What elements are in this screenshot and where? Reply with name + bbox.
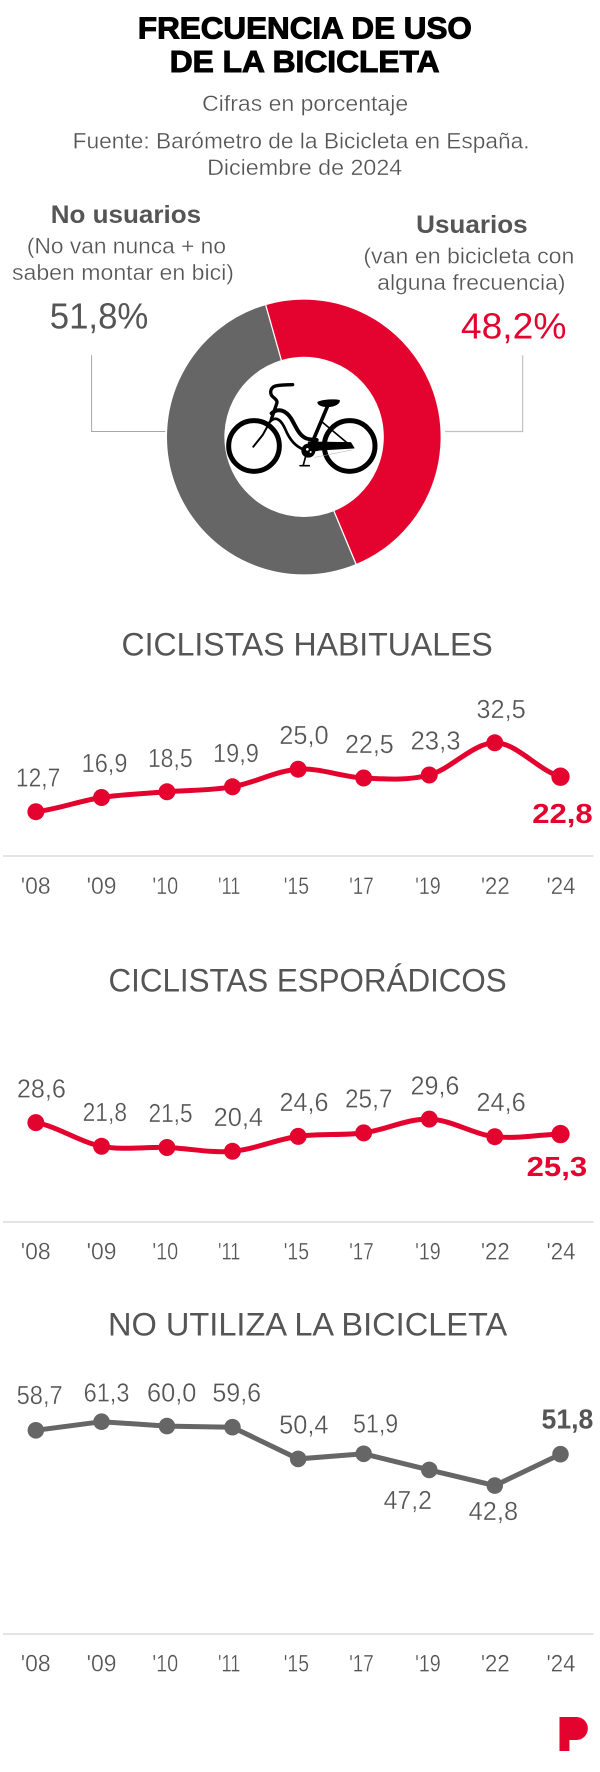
values: no utiliza: 50,4	[279, 1411, 329, 1439]
latest value: esporádicos: 25,3	[527, 1151, 587, 1182]
values: no utiliza: 60,0	[147, 1380, 196, 1408]
years: habituales: '08	[21, 873, 51, 900]
values: no utiliza: 51,9	[353, 1410, 398, 1438]
values: habituales: 23,3	[410, 728, 461, 756]
axis: esporádicos	[3, 1221, 593, 1223]
axis: no utiliza	[3, 1633, 593, 1635]
years: esporádicos: '11	[218, 1238, 240, 1266]
years: habituales: '17	[349, 873, 374, 900]
years: esporádicos: '15	[284, 1238, 309, 1266]
years: no utiliza: '17	[349, 1651, 374, 1678]
points: no utiliza	[28, 1413, 569, 1494]
years: no utiliza: '10	[152, 1651, 178, 1678]
label: usuarios	[363, 211, 574, 346]
leader line: no usuarios	[92, 355, 165, 432]
years: esporádicos: '19	[415, 1238, 441, 1266]
years: esporádicos: '17	[349, 1238, 374, 1266]
line: no utiliza	[36, 1422, 560, 1486]
label: usuarios: (van en bicicleta con	[363, 243, 574, 268]
years: habituales: '10	[152, 873, 178, 900]
values: habituales: 18,5	[148, 745, 193, 773]
latest value: habituales: 22,8	[532, 798, 593, 829]
years: esporádicos	[21, 1238, 575, 1266]
values: no utiliza	[17, 1380, 518, 1526]
years: habituales: '19	[415, 873, 441, 900]
values: habituales: 22,5	[345, 731, 394, 759]
subtitle: Cifras en porcentaje	[202, 91, 408, 116]
title: DE LA BICICLETA	[170, 44, 440, 79]
values: habituales: 16,9	[82, 750, 127, 778]
values: no utiliza: 47,2	[384, 1487, 432, 1515]
values: habituales: 19,9	[213, 740, 259, 768]
years: habituales: '22	[481, 873, 510, 900]
years: no utiliza: '09	[87, 1651, 116, 1678]
values: no utiliza: 61,3	[84, 1380, 129, 1408]
donut segment: usuarios	[266, 299, 441, 565]
leader line: usuarios	[445, 355, 523, 432]
values: habituales: 25,0	[279, 722, 329, 750]
values: habituales: 12,7	[16, 764, 60, 792]
heading: ciclistas habituales: CICLISTAS HABITUALES	[121, 626, 493, 663]
values: esporádicos: 21,8	[83, 1099, 127, 1127]
points: habituales	[27, 734, 570, 820]
values: esporádicos: 21,5	[149, 1100, 193, 1128]
values: no utiliza: 58,7	[17, 1382, 63, 1410]
logo: P	[559, 1717, 588, 1751]
years: habituales	[21, 873, 575, 900]
source: Fuente: Barómetro de la Bicicleta en España.	[73, 128, 530, 154]
years: esporádicos: '10	[152, 1238, 178, 1266]
label: no usuarios: (No van nunca + no	[27, 233, 226, 258]
label: no usuarios: 51,8%	[50, 295, 148, 337]
years: esporádicos: '08	[21, 1238, 51, 1266]
values: esporádicos: 29,6	[410, 1072, 459, 1100]
label: usuarios: 48,2%	[461, 305, 566, 346]
chart: ciclistas habituales	[3, 626, 593, 900]
years: habituales: '15	[284, 873, 309, 900]
donut chart	[166, 299, 441, 575]
values: esporádicos: 24,6	[280, 1089, 329, 1117]
years: habituales: '24	[547, 873, 575, 900]
icon: bicycle	[229, 385, 375, 471]
latest value: no utiliza: 51,8	[542, 1404, 593, 1435]
chart: ciclistas esporádicos	[3, 962, 593, 1266]
years: no utiliza: '08	[21, 1651, 51, 1678]
years: no utiliza	[21, 1651, 575, 1678]
label: no usuarios: No usuarios	[51, 201, 201, 229]
source: Diciembre de 2024	[207, 155, 402, 180]
line: habituales	[36, 743, 560, 812]
values: habituales: 32,5	[476, 696, 526, 724]
values: esporádicos	[17, 1072, 526, 1132]
label: usuarios: alguna frecuencia)	[377, 270, 565, 295]
values: esporádicos: 28,6	[17, 1075, 66, 1103]
heading: ciclistas esporádicos: CICLISTAS ESPORÁDICOS	[109, 962, 507, 998]
values: esporádicos: 20,4	[214, 1104, 263, 1132]
values: no utiliza: 42,8	[469, 1498, 518, 1526]
years: esporádicos: '09	[87, 1238, 116, 1266]
donut segment: no usuarios	[166, 304, 356, 575]
label: no usuarios	[12, 201, 234, 337]
points: esporádicos	[27, 1111, 570, 1160]
years: no utiliza: '11	[218, 1651, 240, 1678]
title: FRECUENCIA DE USO	[138, 10, 472, 45]
years: esporádicos: '24	[547, 1238, 575, 1266]
values: esporádicos: 24,6	[476, 1089, 526, 1117]
years: esporádicos: '22	[481, 1238, 510, 1266]
source	[73, 128, 530, 180]
years: no utiliza: '24	[547, 1651, 575, 1678]
years: no utiliza: '19	[415, 1651, 441, 1678]
label: usuarios: Usuarios	[416, 211, 528, 239]
chart: no utiliza la bicicleta	[3, 1307, 593, 1678]
axis: habituales	[3, 855, 593, 857]
title	[138, 10, 472, 79]
label: no usuarios: saben montar en bici)	[12, 260, 234, 285]
years: habituales: '11	[218, 873, 240, 900]
years: no utiliza: '22	[481, 1651, 510, 1678]
line: esporádicos	[36, 1119, 560, 1152]
years: no utiliza: '15	[284, 1651, 309, 1678]
heading: no utiliza la bicicleta: NO UTILIZA LA BICICLETA	[108, 1307, 508, 1343]
values: habituales	[16, 696, 526, 792]
years: habituales: '09	[87, 873, 116, 900]
values: esporádicos: 25,7	[345, 1086, 392, 1114]
values: no utiliza: 59,6	[212, 1380, 261, 1408]
